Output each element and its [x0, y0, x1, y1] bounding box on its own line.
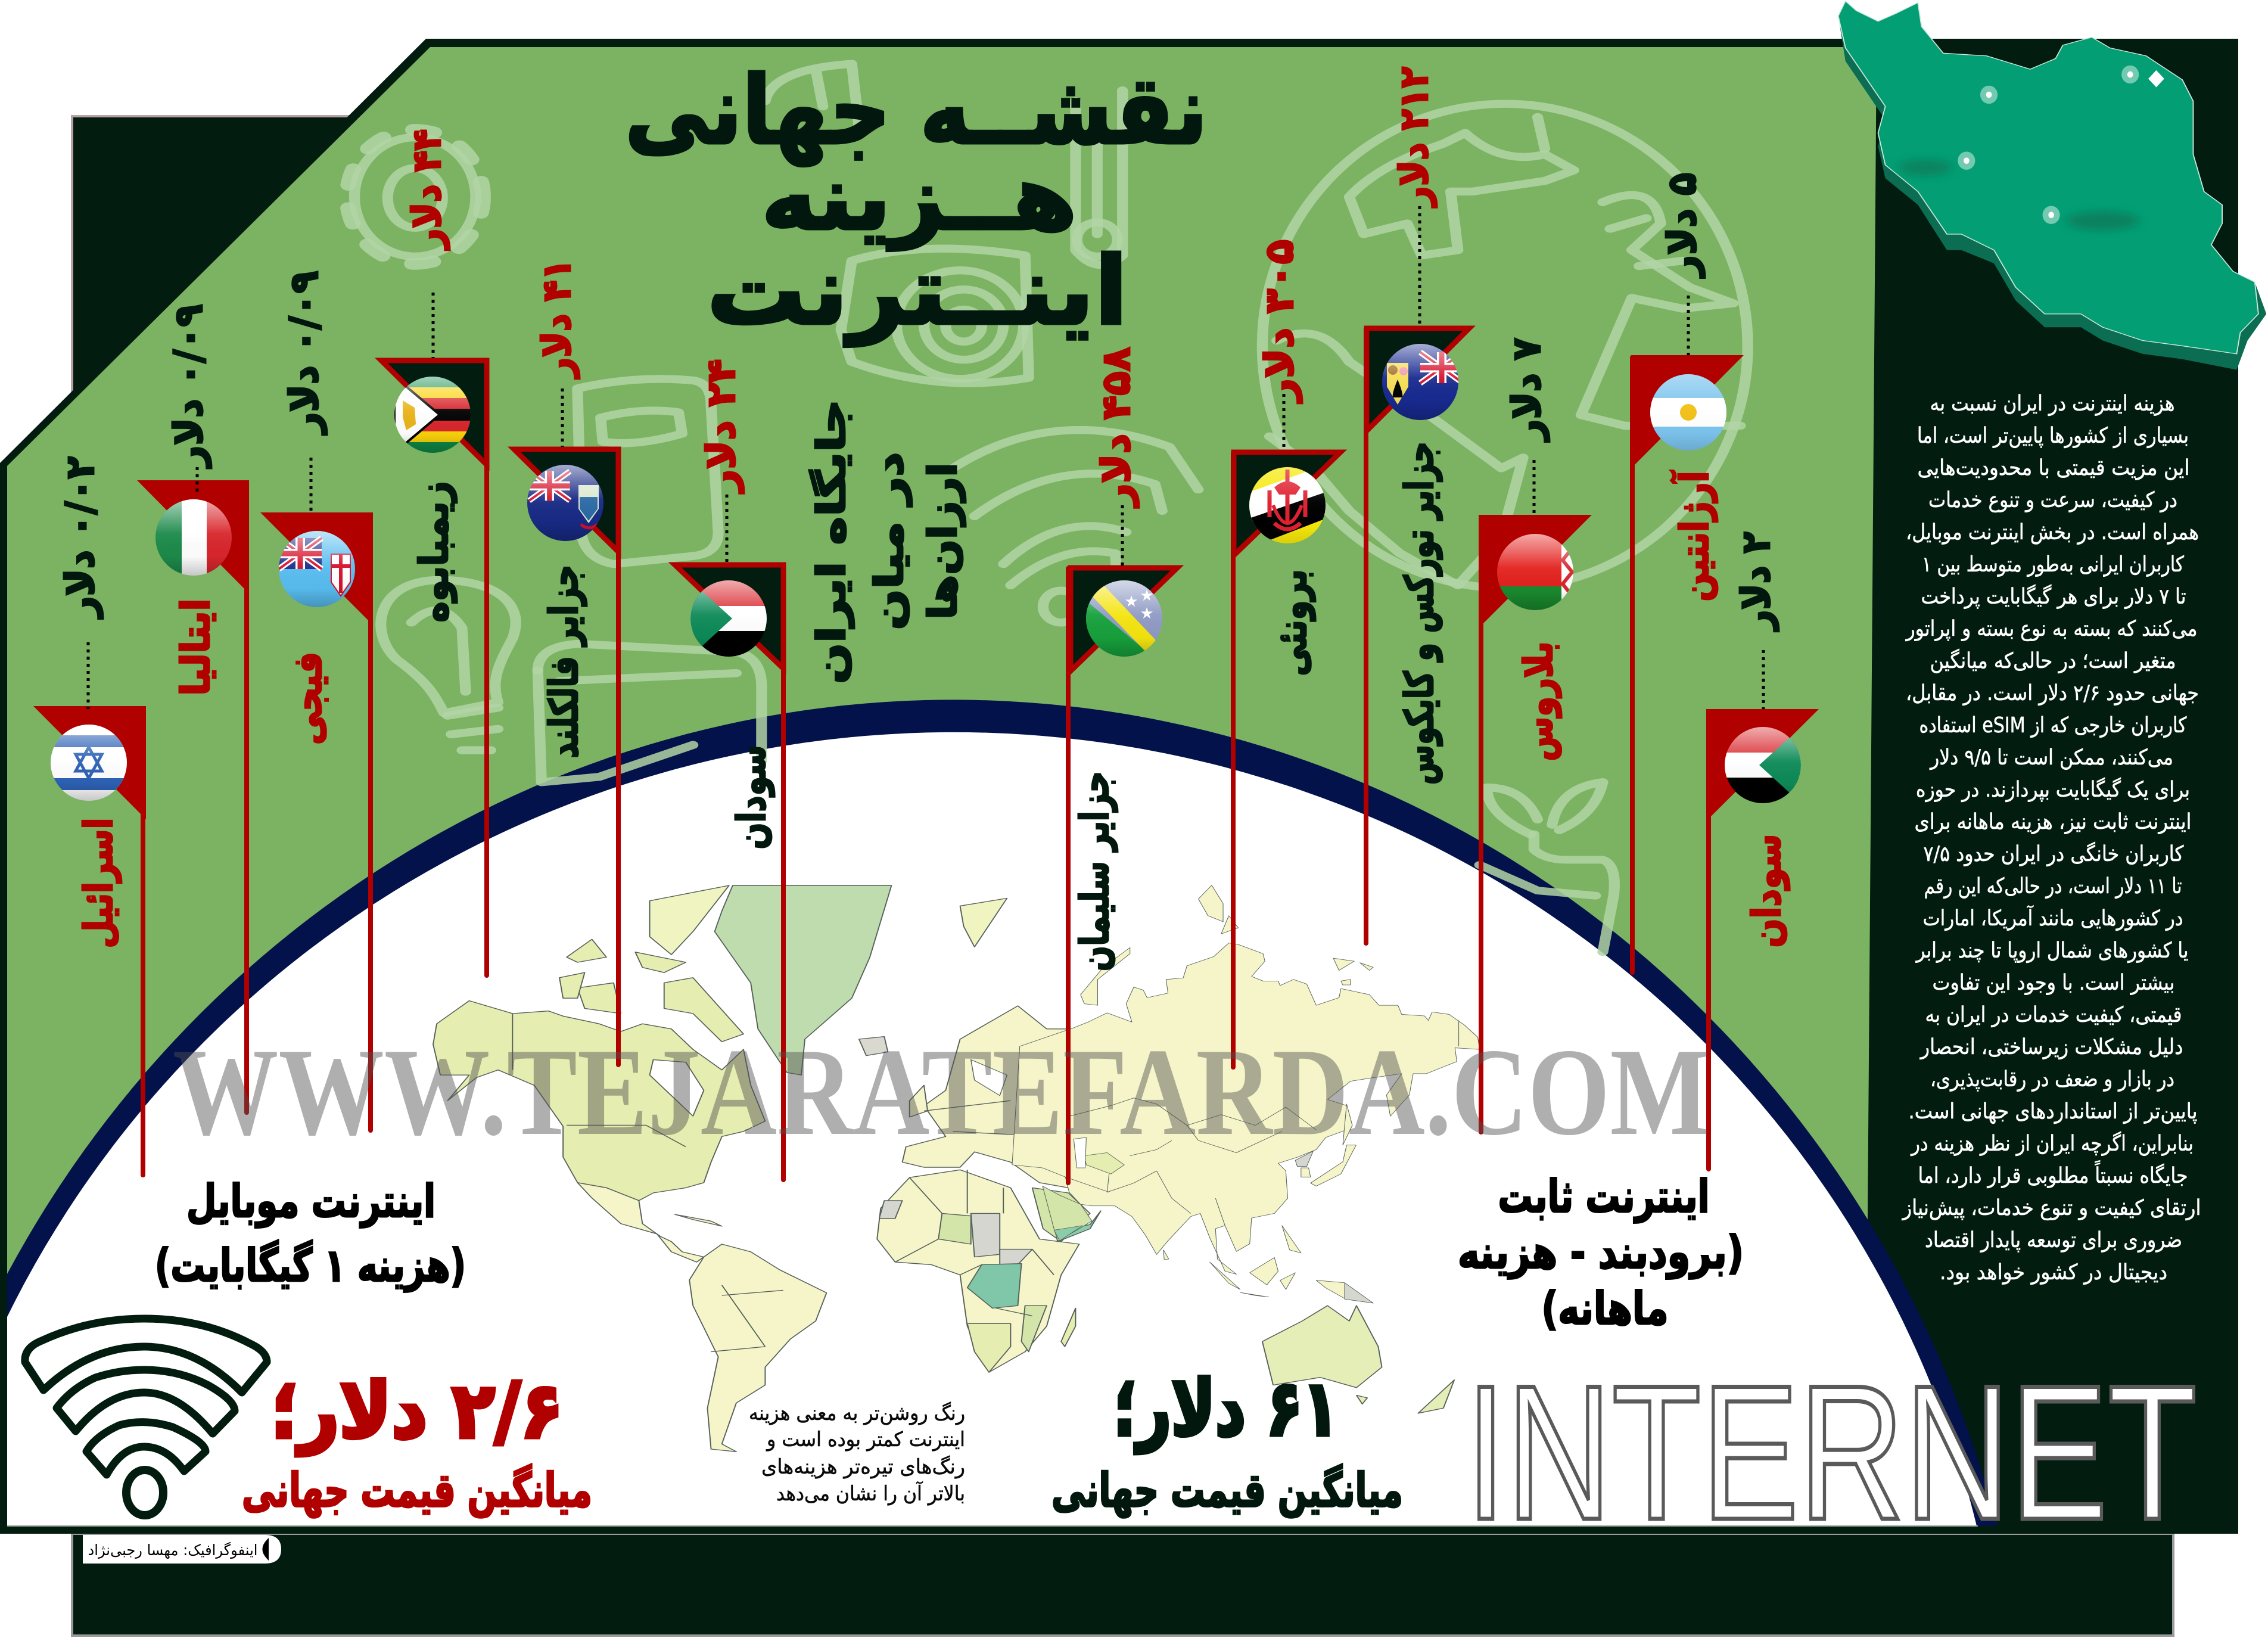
pin: Sudan (right) — [1706, 532, 1819, 1169]
pin: Solomon Islands — [1068, 347, 1177, 1183]
heading: mobile internet — [155, 1174, 466, 1292]
text block: Iran internet cost paragraph: می‌کنند که بسته به نوع بسته و اپراتور — [1905, 617, 2197, 641]
pin: Fiji: ۰/۰۹ دلار — [281, 271, 327, 435]
text block: Iran internet cost paragraph: جایگاه نسبتاً مطلوبی قرار دارد، اما — [1918, 1160, 2188, 1188]
text block: Iran internet cost paragraph: تا ۷ دلار برای هر گیگابایت پرداخت — [1921, 584, 2186, 609]
title — [625, 56, 1208, 347]
pin: Fiji: فیجی — [285, 652, 331, 745]
map: Europe and Africa — [877, 899, 1101, 1372]
heading: fixed internet: ماهانه) — [1542, 1282, 1668, 1335]
text block: Iran internet cost paragraph: جهانی حدود ۲/۶ دلار است. در مقابل، — [1906, 681, 2199, 705]
pin: Argentina — [1631, 173, 1744, 972]
heading: mobile internet: اینترنت موبایل — [186, 1174, 435, 1228]
map: Iran — [1838, 1, 2266, 370]
world map — [433, 885, 1480, 1451]
pin: Belarus — [1479, 338, 1592, 1132]
panel: bottom dark band — [72, 1534, 2173, 1636]
panel: upper-left dark corner — [72, 116, 357, 393]
text block: Iran internet cost paragraph: در بازار و ضعف در رقابت‌پذیری، — [1930, 1067, 2174, 1092]
pin: Solomon Islands: ★ — [1140, 605, 1154, 623]
pin: Brunei: ۳۰۵ دلار — [1256, 240, 1302, 403]
pin: Argentina: ۵ دلار — [1659, 173, 1705, 278]
pin: Italy: ۰/۰۹ دلار — [166, 304, 211, 468]
pin: Israel: اسرائیل — [76, 818, 122, 949]
title: نقشــه جهانی — [625, 56, 1208, 166]
text block: Iran internet cost paragraph: پایین‌تر از استانداردهای جهانی است. — [1909, 1099, 2197, 1124]
text block: Iran internet cost paragraph: کاربران خارجی که از eSIM استفاده — [1919, 713, 2187, 738]
doodle: gear — [347, 130, 483, 264]
credit pill: اینفوگرافیک: مهسا رجبی‌نژاد — [88, 1541, 257, 1559]
pin: Solomon Islands: جزایر سلیمان — [1072, 771, 1118, 971]
text block: Iran internet cost paragraph: دلیل مشکلات زیرساختی، انحصار — [1919, 1035, 2183, 1059]
title: اینــترنت — [707, 237, 1128, 347]
pin: Zimbabwe: ۴۴ دلار — [404, 129, 450, 250]
doodle: plant and chair — [1487, 782, 1603, 834]
pin: Falkland Islands: ۴۱ دلار — [534, 259, 580, 379]
pin: Turks and Caicos: ۲۱۲ دلار — [1391, 67, 1437, 208]
map legend note: رنگ روشن‌تر به معنی هزینه — [749, 1401, 965, 1425]
pin: Sudan (left): سودان — [729, 745, 775, 850]
pin: Solomon Islands: ★ — [1140, 587, 1154, 605]
doodle: wifi — [953, 430, 1198, 623]
pin: Brunei: برونئی — [1270, 570, 1316, 676]
heading: rank of Iran among cheapest — [808, 399, 966, 684]
pin: Sudan (right): ۲ دلار — [1733, 532, 1779, 632]
text block: Iran internet cost paragraph: ارتقای کیفیت و تنوع خدمات، پیش‌نیاز — [1902, 1196, 2201, 1220]
pin: Turks and Caicos: جزایر تورکس و کایکوس — [1396, 442, 1443, 785]
heading: mobile internet: (هزینه ۱ گیگابایت) — [155, 1239, 466, 1292]
pin: Brunei — [1233, 240, 1340, 1067]
map legend note — [749, 1401, 965, 1506]
watermark: WWW.TEJARATEFARDA.COM — [173, 1023, 1710, 1161]
map legend note: رنگ‌های تیره‌تر هزینه‌های — [761, 1455, 965, 1479]
stat: mobile global average: میانگین قیمت جهانی — [242, 1464, 592, 1518]
heading: fixed internet: (برودبند - هزینه — [1458, 1226, 1744, 1279]
panel: green background — [7, 47, 1877, 1526]
text block: Iran internet cost paragraph: تا ۱۱ دلار است، در حالی‌که این رقم — [1924, 874, 2182, 899]
text block: Iran internet cost paragraph: کاربران ایرانی به‌طور متوسط بین ۱ — [1922, 552, 2185, 577]
stat: mobile global average — [242, 1367, 592, 1518]
pin: Solomon Islands: ۴۵۸ دلار — [1093, 347, 1139, 508]
pin: Turks and Caicos — [1366, 67, 1469, 943]
map legend note: اینترنت کمتر بوده است و — [766, 1428, 965, 1451]
stat: mobile global average: ۲/۶ دلار؛ — [271, 1367, 564, 1456]
stat: fixed global average: ۶۱ دلار؛ — [1113, 1365, 1339, 1453]
text block: Iran internet cost paragraph — [1902, 391, 2201, 1285]
pin: Zimbabwe: زیمبابوه — [411, 481, 458, 622]
pin: Sudan (left) — [675, 359, 783, 1180]
doodle: camera and thermometer — [765, 64, 1122, 383]
text block: Iran internet cost paragraph: بیشتر است. با وجود این تفاوت — [1933, 971, 2174, 995]
pin: Israel — [33, 456, 146, 1175]
pin: Zimbabwe — [381, 129, 487, 975]
text block: Iran internet cost paragraph: در کیفیت، سرعت و تنوع خدمات — [1928, 488, 2177, 512]
pin: Sudan (right): سودان — [1744, 834, 1790, 947]
pin: Belarus: ۷ دلار — [1504, 338, 1550, 442]
doodle: globe — [1262, 104, 1748, 588]
text block: Iran internet cost paragraph: متغیر است؛ در حالی‌که میانگین — [1930, 648, 2176, 673]
title: هــزینه — [761, 147, 1077, 251]
text block: Iran internet cost paragraph: این مزیت قیمتی با محدودیت‌هایی — [1917, 456, 2190, 480]
stat: fixed global average: میانگین قیمت جهانی — [1051, 1464, 1403, 1518]
map legend note: بالاتر آن را نشان می‌دهد — [776, 1481, 965, 1506]
text block: Iran internet cost paragraph: در کشورهایی مانند آمریکا، امارات — [1923, 905, 2183, 931]
pin: Italy: ایتالیا — [173, 598, 219, 696]
icon: wifi — [25, 1319, 267, 1515]
text block: Iran internet cost paragraph: اینترنت ثابت نیز، هزینه ماهانه برای — [1915, 810, 2191, 834]
heading: rank of Iran among cheapest: در میان — [866, 452, 912, 630]
heading: rank of Iran among cheapest: ارزان‌ها — [920, 462, 966, 620]
heading: rank of Iran among cheapest: جایگاه ایران — [808, 399, 854, 684]
pin: Falkland Islands: جزایر فالکلند — [541, 565, 587, 758]
pin: Sudan (left): ۲۴ دلار — [698, 359, 744, 493]
text block: Iran internet cost paragraph: برای یک گیگابایت بپردازند. در حوزه — [1916, 777, 2190, 802]
pin: Israel: ۰/۰۲ دلار — [57, 456, 103, 619]
map: Americas and Greenland — [433, 885, 891, 1451]
text block: Iran internet cost paragraph: یا کشورهای شمال اروپا تا چند برابر — [1915, 938, 2189, 963]
text block: Iran internet cost paragraph: بسیاری از کشورها پایین‌تر است، اما — [1917, 424, 2189, 448]
doodle: light bulb — [381, 580, 516, 750]
pin: Italy — [137, 304, 249, 1112]
stat: fixed global average — [1051, 1365, 1403, 1518]
text block: Iran internet cost paragraph: ضروری برای توسعه پایدار اقتصاد — [1925, 1228, 2182, 1252]
doodle: laptop — [538, 644, 761, 782]
heading: fixed internet — [1458, 1170, 1744, 1335]
text block: Iran internet cost paragraph: قیمتی، کیفیت خدمات در ایران به — [1925, 1003, 2182, 1027]
text block: Iran internet cost paragraph: هزینه اینترنت در ایران نسبت به — [1930, 391, 2174, 416]
text block: Iran internet cost paragraph: همراه است. در بخش اینترنت موبایل، — [1906, 520, 2199, 545]
credit pill — [83, 1535, 281, 1564]
pin: Falkland Islands — [514, 259, 618, 1065]
pin: Argentina: آرژانتین — [1670, 470, 1718, 602]
pin: Fiji — [260, 271, 373, 1130]
doodle: tablet — [577, 379, 718, 564]
pin: Solomon Islands: ★ — [1124, 593, 1138, 611]
panel: navy arc and white dome — [7, 700, 1997, 1526]
text block: Iran internet cost paragraph: کاربران خانگی در ایران حدود ۷/۵ — [1923, 841, 2184, 866]
text block: Iran internet cost paragraph: می‌کنند، ممکن است تا ۹/۵ دلار — [1929, 745, 2173, 770]
map: Asia and Oceania — [1012, 885, 1480, 1303]
background doodles — [347, 64, 1748, 952]
text block: Iran internet cost paragraph: بنابراین، اگرچه ایران از نظر هزینه در — [1910, 1131, 2194, 1156]
pin: Belarus: بلاروس — [1516, 641, 1562, 762]
heading: fixed internet: اینترنت ثابت — [1498, 1170, 1710, 1223]
text block: Iran internet cost paragraph: دیجیتال در کشور خواهد بود. — [1940, 1260, 2167, 1285]
